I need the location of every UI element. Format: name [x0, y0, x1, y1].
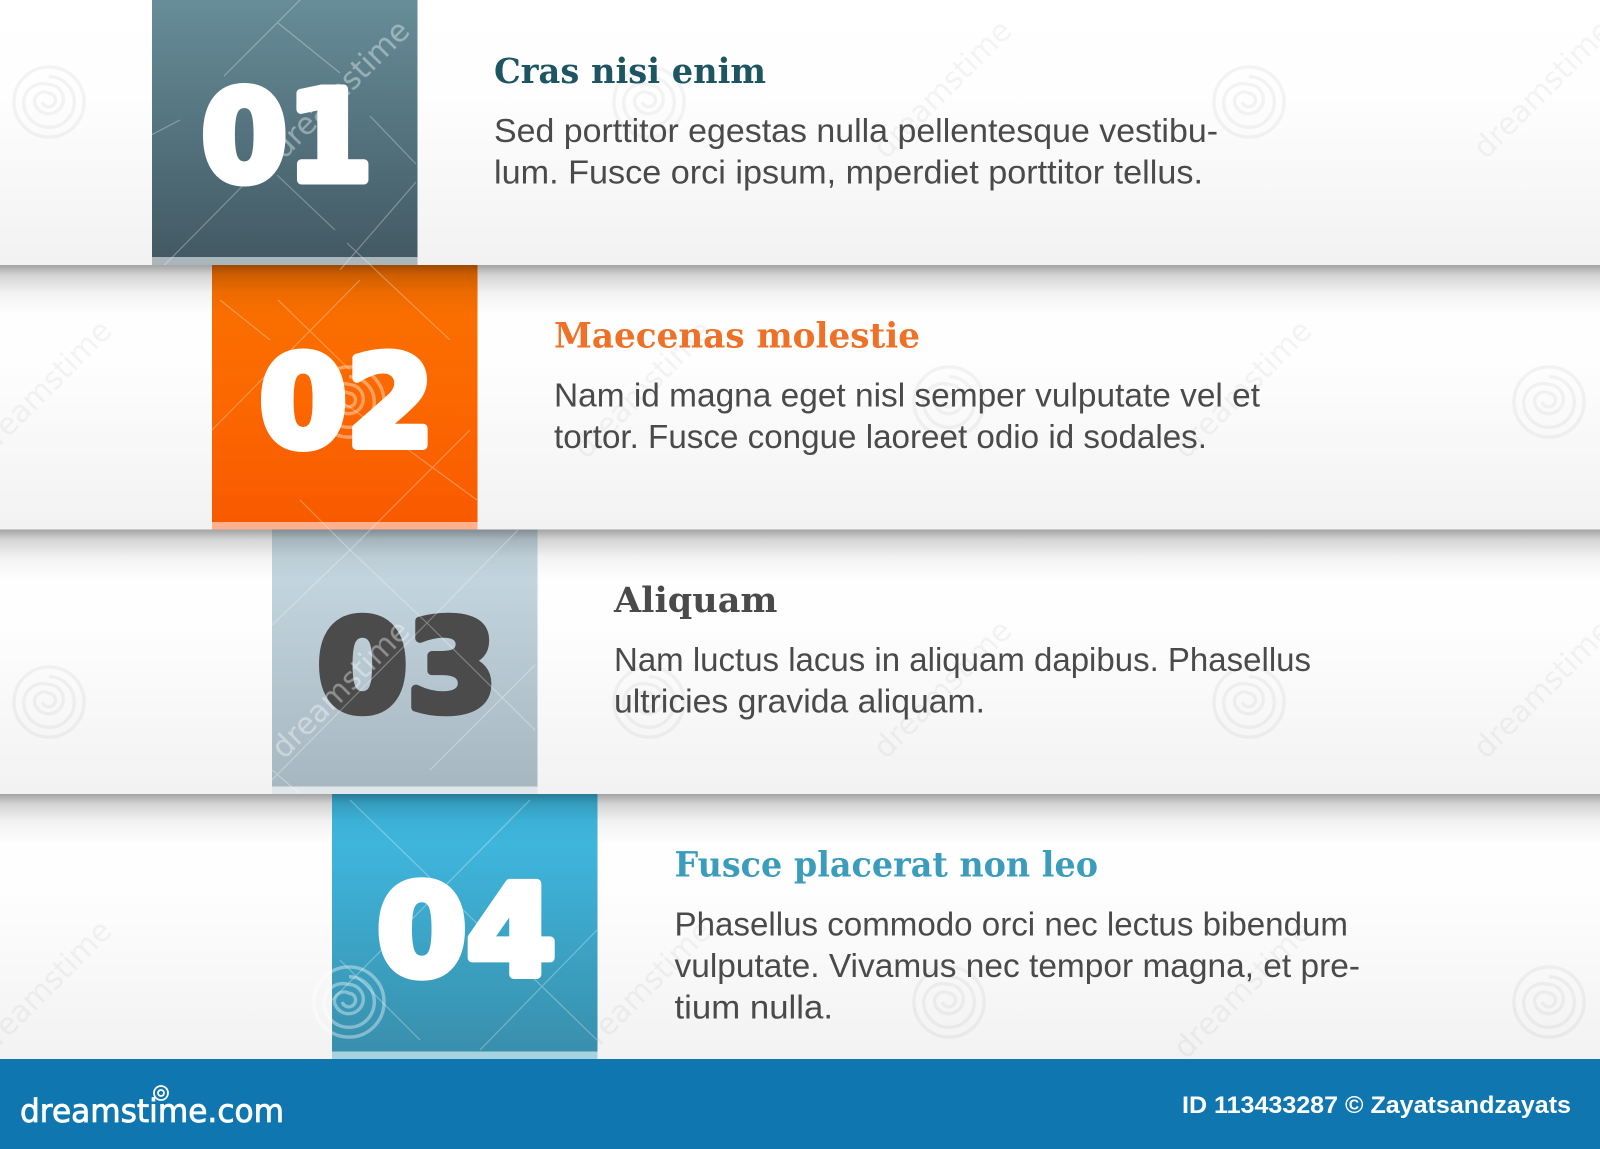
- footer logo: dreamstime.com: [20, 1092, 284, 1130]
- text block 01: [494, 113, 1218, 192]
- panel: step 04: [332, 794, 1360, 1059]
- watermark text on white: dreamstime: [567, 313, 719, 466]
- panel: step 02: [212, 265, 1261, 530]
- text block 03: [614, 642, 1311, 720]
- text block 02: [554, 378, 1261, 456]
- number 02: 02: [260, 330, 434, 476]
- text block 03: Nam luctus lacus in aliquam dapibus. Phasellus: [614, 642, 1311, 679]
- heading 04: Fusce placerat non leo: [674, 844, 1098, 886]
- tile 02 light edge: [212, 522, 478, 530]
- number 03: 03: [318, 595, 497, 740]
- panel: step 03: [272, 530, 1311, 794]
- text block 04: Phasellus commodo orci nec lectus bibendum: [674, 906, 1348, 944]
- text block 02: Nam id magna eget nisl semper vulputate vel et: [554, 378, 1261, 414]
- number tile 01: [152, 0, 418, 257]
- text block 04: tium nulla.: [674, 990, 833, 1026]
- text block 02: tortor. Fusce congue laoreet odio id sodales.: [554, 419, 1207, 456]
- number 01: 01: [202, 65, 372, 210]
- tile 03 light edge: [272, 786, 538, 794]
- number tile 02: [212, 265, 478, 522]
- panel: step 01: [152, 0, 1218, 265]
- watermark text on white: dreamstime: [867, 13, 1019, 166]
- heading 01: Cras nisi enim: [494, 51, 766, 92]
- watermark spirals on tiles: [314, 367, 384, 1037]
- panel: row 3 background: [0, 530, 1600, 794]
- watermark text on tiles: [265, 13, 417, 766]
- panel: row 4 background: [0, 794, 1600, 1059]
- watermark text on white: dreamstime: [567, 913, 719, 1066]
- heading 02: Maecenas molestie: [554, 316, 920, 356]
- footer bar: [0, 1059, 1600, 1149]
- panel: row 1 background: [0, 0, 1600, 265]
- footer credit: ID 113433287 © Zayatsandzayats: [1182, 1092, 1571, 1119]
- watermark text on white: dreamstime: [1167, 913, 1319, 1066]
- text block 01: lum. Fusce orci ipsum, mperdiet porttitor tellus.: [494, 154, 1203, 192]
- tile 01 light edge: [152, 257, 418, 265]
- text block 04: [674, 906, 1360, 1026]
- number 04: 04: [377, 860, 556, 1004]
- text block 04: vulputate. Vivamus nec tempor magna, et pre-: [674, 948, 1360, 985]
- watermark text on white: dreamstime: [1167, 313, 1319, 466]
- icon: logo spiral: [154, 1086, 168, 1100]
- heading 03: Aliquam: [613, 580, 778, 621]
- text block 01: Sed porttitor egestas nulla pellentesque vestibu-: [494, 113, 1218, 150]
- number tile 03: [272, 530, 538, 786]
- panel: row 2 background: [0, 265, 1600, 530]
- number tile 04: [332, 794, 598, 1052]
- watermark text on tiles: dreamstime: [265, 13, 417, 166]
- watermark text on tiles: dreamstime: [265, 613, 417, 766]
- tile 04 light edge: [332, 1052, 598, 1059]
- text block 03: ultricies gravida aliquam.: [614, 684, 985, 720]
- watermark text on white: dreamstime: [867, 613, 1019, 766]
